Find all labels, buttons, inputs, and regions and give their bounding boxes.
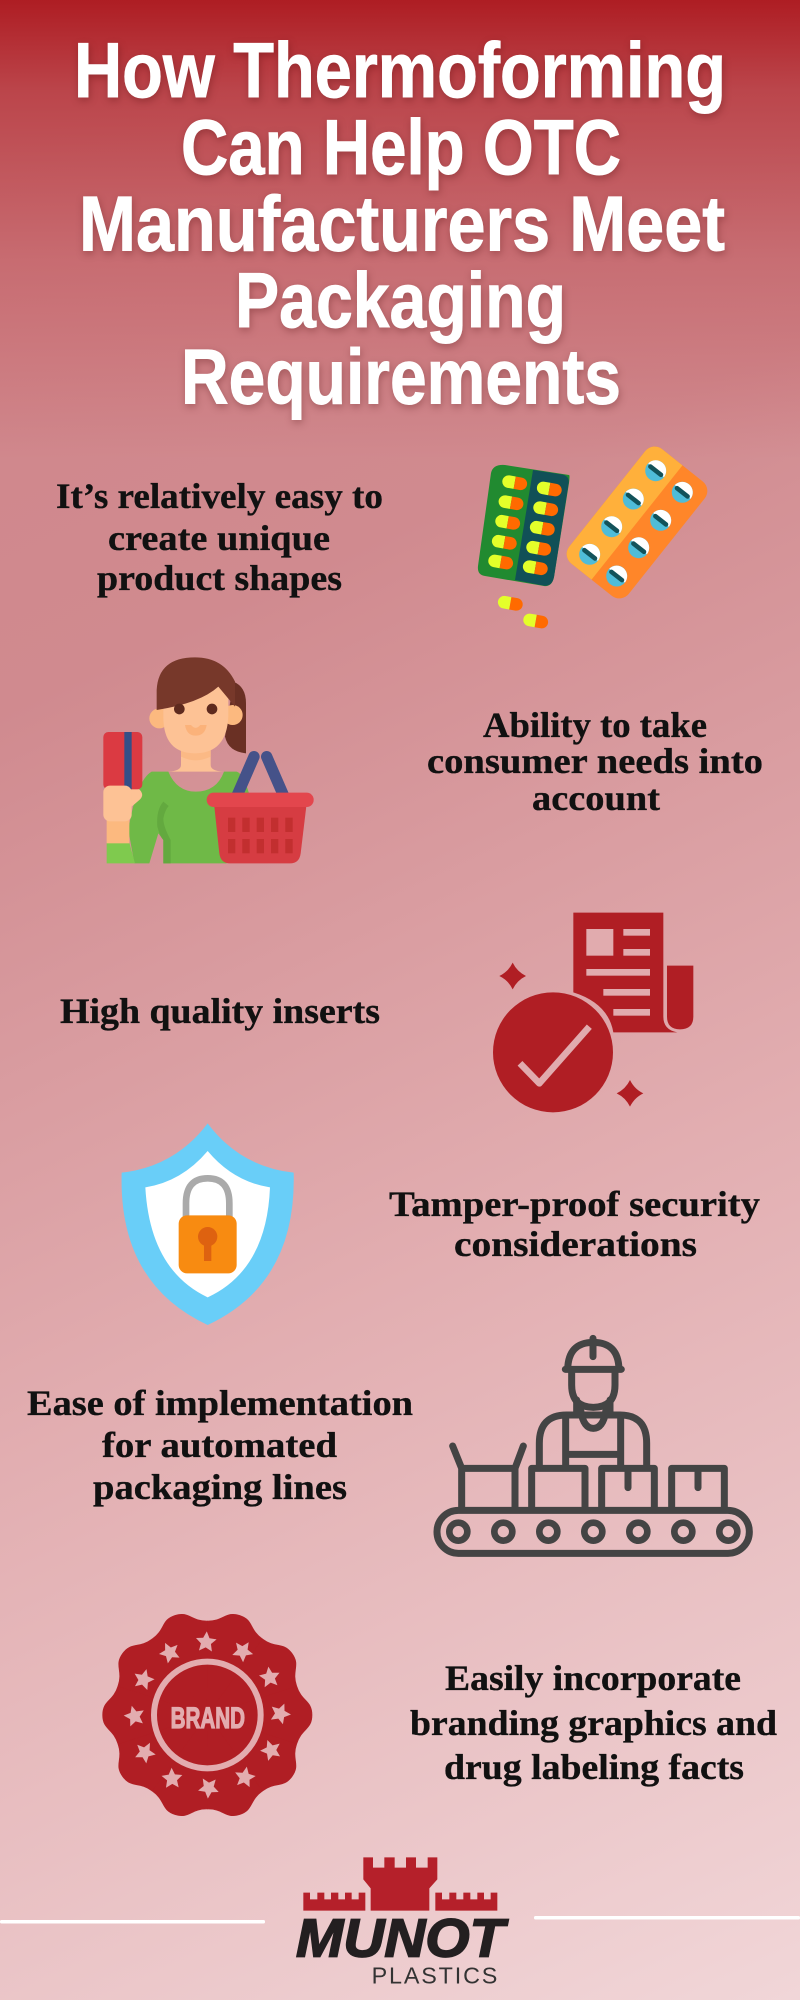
text: branding graphics: branding graphics and [410,1703,777,1743]
icon: brand seal [103,1606,312,1824]
icon: worker at conveyor belt [437,1338,749,1553]
text: tamper-proof security: Tamper-proof security [389,1184,760,1224]
icon: shopper with card and basket [103,657,314,863]
title: Manufacturers Meet [79,180,725,268]
title [74,26,726,420]
text: unique product shapes: product shapes [97,558,342,598]
text: unique product shapes: It’s relatively easy to [56,476,383,516]
icon: document with check mark [493,913,693,1112]
title: Can Help OTC [181,103,621,191]
logo: Munot Plastics: MUNOT [296,1910,509,1969]
icon: blister packs of pills [478,442,712,629]
icon part: orange tablet blister [562,442,712,603]
title: Packaging [235,256,566,344]
logo: Munot Plastics [296,1857,509,1988]
text: branding graphics: drug labeling facts [444,1747,744,1787]
text: consumer needs: account [532,778,660,818]
text: automated packaging lines: packaging lines [93,1467,347,1507]
text: unique product shapes [56,476,383,598]
text: automated packaging lines: for automated [102,1425,337,1465]
text: tamper-proof security: considerations [454,1224,697,1264]
text: tamper-proof security [389,1184,760,1264]
icon: shield with padlock [122,1123,294,1325]
title: Requirements [181,332,621,420]
text: automated packaging lines [27,1383,413,1507]
text: consumer needs [427,705,763,818]
text: consumer needs: Ability to take [483,705,707,745]
text: high quality inserts: High quality inserts [60,991,380,1031]
text: branding graphics [410,1658,777,1787]
text: automated packaging lines: Ease of implementation [27,1383,413,1423]
logo: Munot Plastics: PLASTICS [372,1962,497,1988]
text: consumer needs: consumer needs into [427,741,763,781]
icon: brand seal: BRAND [171,1702,245,1735]
icon part: green capsule blister [478,465,570,629]
text: branding graphics: Easily incorporate [445,1658,741,1698]
text: unique product shapes: create unique [108,518,330,558]
